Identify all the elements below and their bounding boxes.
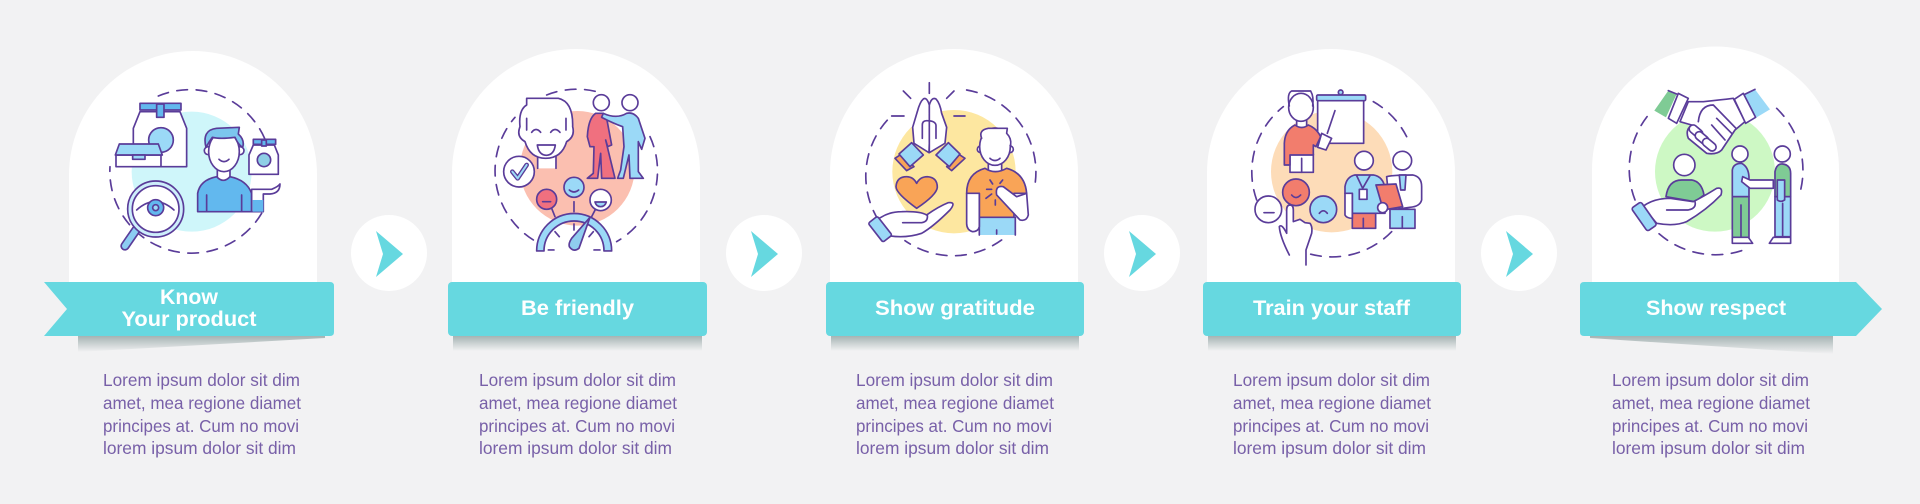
body text: Lorem ipsum dolor sit dim — [1612, 370, 1809, 390]
arch card — [69, 51, 317, 290]
icon: product and customer — [110, 90, 280, 253]
heading: know your product: Know — [160, 286, 219, 309]
heading: show gratitude: Show gratitude — [875, 297, 1035, 320]
body text: lorem ipsum dolor sit dim — [1233, 438, 1426, 458]
ribbon: be friendly — [448, 282, 707, 351]
panel: train your staff — [1203, 49, 1461, 458]
body text: Lorem ipsum dolor sit dim — [1233, 370, 1430, 390]
body text: principes at. Cum no movi — [1233, 416, 1429, 436]
body text: lorem ipsum dolor sit dim — [1612, 438, 1805, 458]
heading: be friendly: Be friendly — [521, 297, 634, 320]
body text: amet, mea regione diamet — [103, 393, 301, 413]
body text: principes at. Cum no movi — [103, 416, 299, 436]
panel: know your product — [44, 51, 334, 458]
ribbon: train your staff — [1203, 282, 1461, 351]
arrow 1 — [351, 215, 427, 291]
arch card — [452, 49, 700, 290]
ribbon: right arrow banner — [1580, 282, 1882, 354]
icon: handshake and respect — [1629, 89, 1803, 255]
heading: show respect: Show respect — [1646, 297, 1786, 320]
arch card — [1592, 47, 1839, 290]
body text: amet, mea regione diamet — [856, 393, 1054, 413]
panel: be friendly — [448, 49, 707, 458]
body text: lorem ipsum dolor sit dim — [479, 438, 672, 458]
body text: Lorem ipsum dolor sit dim — [479, 370, 676, 390]
panel: show respect — [1580, 47, 1882, 458]
body text: amet, mea regione diamet — [479, 393, 677, 413]
panel: show gratitude — [826, 49, 1084, 458]
arch card — [830, 49, 1078, 290]
ribbon: show gratitude — [826, 282, 1084, 351]
icon: friendly faces and gauge — [495, 89, 658, 251]
icon: praying hands, heart and person — [866, 83, 1036, 256]
arrow 2 — [726, 215, 802, 291]
body text: lorem ipsum dolor sit dim — [103, 438, 296, 458]
body text: principes at. Cum no movi — [479, 416, 675, 436]
body text: Lorem ipsum dolor sit dim — [856, 370, 1053, 390]
body text: principes at. Cum no movi — [1612, 416, 1808, 436]
heading: train your staff: Train your staff — [1253, 297, 1411, 320]
arrow 4 — [1481, 215, 1557, 291]
arch card — [1207, 49, 1455, 290]
body text: principes at. Cum no movi — [856, 416, 1052, 436]
body text: amet, mea regione diamet — [1233, 393, 1431, 413]
body text: Lorem ipsum dolor sit dim — [103, 370, 300, 390]
body text: lorem ipsum dolor sit dim — [856, 438, 1049, 458]
ribbon: left notched banner — [44, 282, 334, 352]
heading: know your product: Your product — [122, 308, 257, 331]
arrow 3 — [1104, 215, 1180, 291]
body text: amet, mea regione diamet — [1612, 393, 1810, 413]
icon: staff training — [1252, 90, 1422, 265]
